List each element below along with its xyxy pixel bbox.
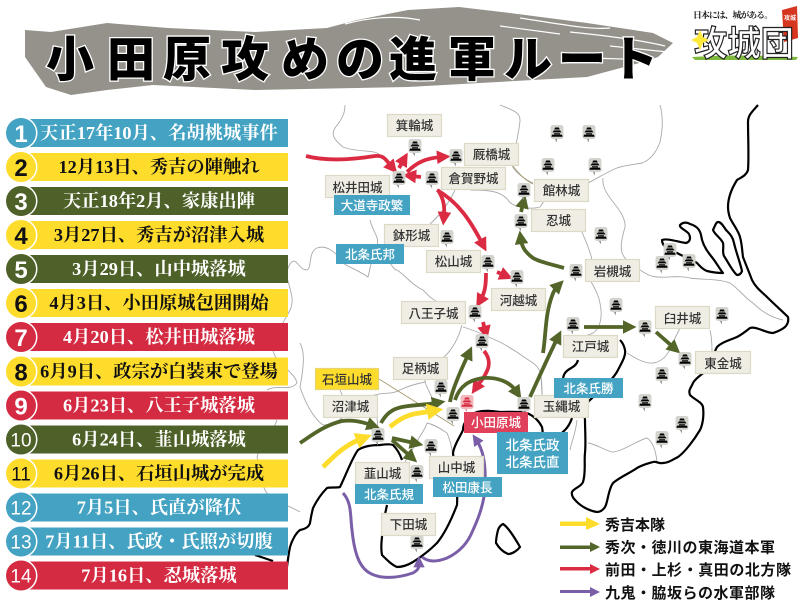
timeline row 13: 13 bbox=[10, 532, 32, 554]
castle label: 山中城 bbox=[430, 456, 484, 478]
timeline row 7: 7 bbox=[14, 325, 28, 352]
logo: 攻城団: 日本には、城がある。 bbox=[693, 9, 773, 20]
castle label: 沼津城 bbox=[324, 396, 378, 418]
timeline row 1: 1 bbox=[14, 121, 28, 148]
title: ル bbox=[504, 20, 552, 90]
logo: 攻城団: 攻城団 bbox=[694, 16, 794, 67]
timeline row 7: 4月20日、松井田城落城 bbox=[63, 327, 255, 347]
castle label: 鉢形城: 鉢形城 bbox=[393, 228, 431, 243]
castle label: 館林城 bbox=[534, 180, 588, 202]
red route arrows: 前田・上杉・真田の北方隊 bbox=[306, 156, 504, 386]
commander label: 大道寺政繁 bbox=[334, 195, 410, 215]
timeline row 11 bbox=[4, 457, 288, 490]
commander label: 松田康長: 松田康長 bbox=[442, 480, 493, 495]
commander label: 北条氏政 北条氏直: 北条氏直 bbox=[506, 454, 560, 470]
timeline row 10 bbox=[4, 423, 288, 456]
timeline row 2: 2 bbox=[14, 155, 28, 182]
castle label: 足柄城 bbox=[394, 358, 448, 380]
timeline row 3: 3 bbox=[14, 189, 28, 216]
timeline row 12 bbox=[4, 491, 288, 524]
castle label: 厩橋城 bbox=[464, 144, 518, 166]
castle label: 小田原城: 小田原城 bbox=[471, 416, 521, 430]
title bbox=[46, 20, 658, 90]
timeline row 12: 7月5日、氏直が降伏 bbox=[77, 496, 242, 518]
castle label: 河越城 bbox=[492, 288, 546, 310]
castle label: 韮山城: 韮山城 bbox=[364, 467, 402, 481]
title: ー bbox=[558, 20, 606, 90]
castle label: 松山城 bbox=[426, 250, 480, 272]
castle label: 石垣山城 bbox=[316, 368, 378, 390]
castle label: 東金城 bbox=[696, 352, 750, 374]
timeline row 9: 9 bbox=[14, 394, 28, 420]
timeline row 1 bbox=[4, 116, 288, 150]
commander label: 大道寺政繁: 大道寺政繁 bbox=[341, 198, 404, 213]
castle label: 山中城: 山中城 bbox=[438, 460, 476, 475]
timeline row 14: 7月16日、忍城落城 bbox=[81, 566, 237, 586]
castle label: 忍城: 忍城 bbox=[546, 214, 571, 228]
castle label: 下田城: 下田城 bbox=[390, 518, 428, 532]
castle label: 江戸城 bbox=[564, 336, 618, 358]
castle label: 臼井城: 臼井城 bbox=[664, 312, 702, 326]
timeline row 3 bbox=[4, 184, 288, 218]
castle label: 岩槻城: 岩槻城 bbox=[594, 264, 632, 279]
castle label: 倉賀野城 bbox=[442, 168, 506, 190]
timeline row 5 bbox=[4, 252, 288, 286]
castle label: 小田原城 bbox=[464, 412, 528, 433]
timeline row 2: 12月13日、秀吉の陣触れ bbox=[58, 157, 260, 177]
timeline row 11: 6月26日、石垣山城が完成 bbox=[54, 462, 264, 484]
castle label: 厩橋城: 厩橋城 bbox=[473, 147, 511, 162]
castle label: 足柄城: 足柄城 bbox=[402, 362, 440, 376]
map: coastline bbox=[255, 105, 788, 567]
timeline row 9 bbox=[4, 389, 288, 422]
title banner: brush stroke bbox=[25, 7, 673, 95]
timeline row 5: 5 bbox=[14, 257, 28, 284]
timeline row 8: 6月9日、政宗が白装束で登場 bbox=[40, 360, 278, 382]
title: 攻 bbox=[221, 20, 269, 90]
timeline row 5: 3月29日、山中城落城 bbox=[72, 259, 246, 279]
timeline row 10: 6月24日、韮山城落城 bbox=[72, 430, 246, 450]
title: 原 bbox=[163, 20, 211, 90]
castle label: 松井田城: 松井田城 bbox=[332, 181, 383, 195]
castle label: 沼津城: 沼津城 bbox=[332, 400, 370, 414]
castle label: 八王子城 bbox=[402, 302, 466, 324]
castle label: 八王子城: 八王子城 bbox=[408, 307, 459, 321]
castle label: 河越城: 河越城 bbox=[500, 293, 538, 308]
title: 小 bbox=[46, 20, 94, 90]
yellow route arrows: 秀吉本隊 bbox=[323, 411, 432, 467]
castle label: 東金城: 東金城 bbox=[704, 356, 742, 371]
logo: 攻城団: 攻城 bbox=[784, 13, 796, 22]
timeline row 6 bbox=[4, 286, 288, 320]
castle label: 鉢形城 bbox=[384, 224, 438, 246]
castle label: 箕輪城 bbox=[388, 114, 442, 136]
timeline row 4 bbox=[4, 218, 288, 252]
castle label: 韮山城 bbox=[356, 462, 410, 484]
commander label: 北条氏規: 北条氏規 bbox=[364, 487, 414, 502]
timeline row 9: 6月23日、八王子城落城 bbox=[63, 396, 255, 416]
title: 進 bbox=[389, 20, 437, 90]
castle label: 江戸城: 江戸城 bbox=[572, 340, 610, 354]
timeline row 4: 3月27日、秀吉が沼津入城 bbox=[54, 225, 264, 245]
castle label: 下田城 bbox=[382, 514, 436, 536]
timeline row 8: 8 bbox=[14, 360, 28, 386]
title: 軍 bbox=[448, 20, 496, 90]
castle label: 玉縄城 bbox=[534, 396, 588, 418]
commander label: 松田康長 bbox=[433, 477, 502, 497]
castle label: 岩槻城 bbox=[586, 260, 640, 282]
legend row: 秀吉本隊 bbox=[560, 514, 665, 535]
title: め bbox=[281, 20, 329, 90]
commander label: 北条氏邦: 北条氏邦 bbox=[345, 247, 395, 262]
castle label: 臼井城 bbox=[656, 306, 710, 328]
castle label: 館林城: 館林城 bbox=[543, 183, 581, 198]
legend row: 前田・上杉・真田の北方隊: 前田・上杉・真田の北方隊 bbox=[605, 559, 791, 580]
castle label: 忍城 bbox=[532, 210, 586, 232]
timeline row 12: 12 bbox=[10, 498, 32, 520]
timeline row 4: 4 bbox=[14, 223, 28, 250]
timeline row 6: 4月3日、小田原城包囲開始 bbox=[49, 293, 270, 313]
title: の bbox=[336, 20, 384, 90]
castle markers bbox=[372, 125, 728, 552]
castle label: 倉賀野城: 倉賀野城 bbox=[448, 171, 499, 186]
castle label: 箕輪城: 箕輪城 bbox=[396, 118, 434, 133]
commander label: 北条氏政 北条氏直 bbox=[497, 432, 568, 474]
timeline row 7 bbox=[4, 320, 288, 354]
timeline row 14 bbox=[4, 559, 288, 592]
timeline row 6: 6 bbox=[14, 291, 28, 318]
timeline row 2 bbox=[4, 150, 288, 184]
title: ト bbox=[610, 20, 658, 90]
castle label: 松井田城 bbox=[326, 176, 390, 198]
legend row: 秀次・徳川の東海道本軍: 秀次・徳川の東海道本軍 bbox=[605, 536, 775, 558]
timeline row 1: 天正17年10月、名胡桃城事件 bbox=[40, 122, 278, 143]
commander label: 北条氏邦 bbox=[336, 244, 404, 264]
commander label: 北条氏勝 bbox=[554, 378, 623, 398]
map: prefecture boundaries bbox=[257, 105, 783, 512]
legend bbox=[560, 514, 791, 600]
timeline row 11: 11 bbox=[11, 464, 31, 486]
castle label: 石垣山城: 石垣山城 bbox=[322, 373, 372, 387]
timeline row 8 bbox=[4, 355, 288, 388]
title: 田 bbox=[107, 20, 155, 90]
commander label: 北条氏政 北条氏直: 北条氏政 bbox=[506, 437, 560, 453]
castle label: 玉縄城: 玉縄城 bbox=[543, 400, 581, 414]
timeline row 13: 7月11日、氏政・氏照が切腹 bbox=[45, 532, 273, 552]
purple route arrows: 九鬼・脇坂らの水軍部隊 bbox=[343, 441, 485, 577]
green route arrows: 秀次・徳川の東海道本軍 bbox=[300, 204, 673, 456]
timeline row 3: 天正18年2月、家康出陣 bbox=[63, 190, 255, 211]
timeline row 13 bbox=[4, 525, 288, 558]
timeline row 14: 14 bbox=[10, 566, 32, 588]
timeline row 10: 10 bbox=[10, 430, 32, 452]
commander label: 北条氏勝: 北条氏勝 bbox=[563, 381, 614, 396]
timeline list bbox=[4, 116, 288, 592]
commander label: 北条氏規 bbox=[355, 484, 423, 504]
castle label: 松山城: 松山城 bbox=[435, 255, 473, 269]
legend row: 秀吉本隊: 秀吉本隊 bbox=[605, 514, 665, 535]
